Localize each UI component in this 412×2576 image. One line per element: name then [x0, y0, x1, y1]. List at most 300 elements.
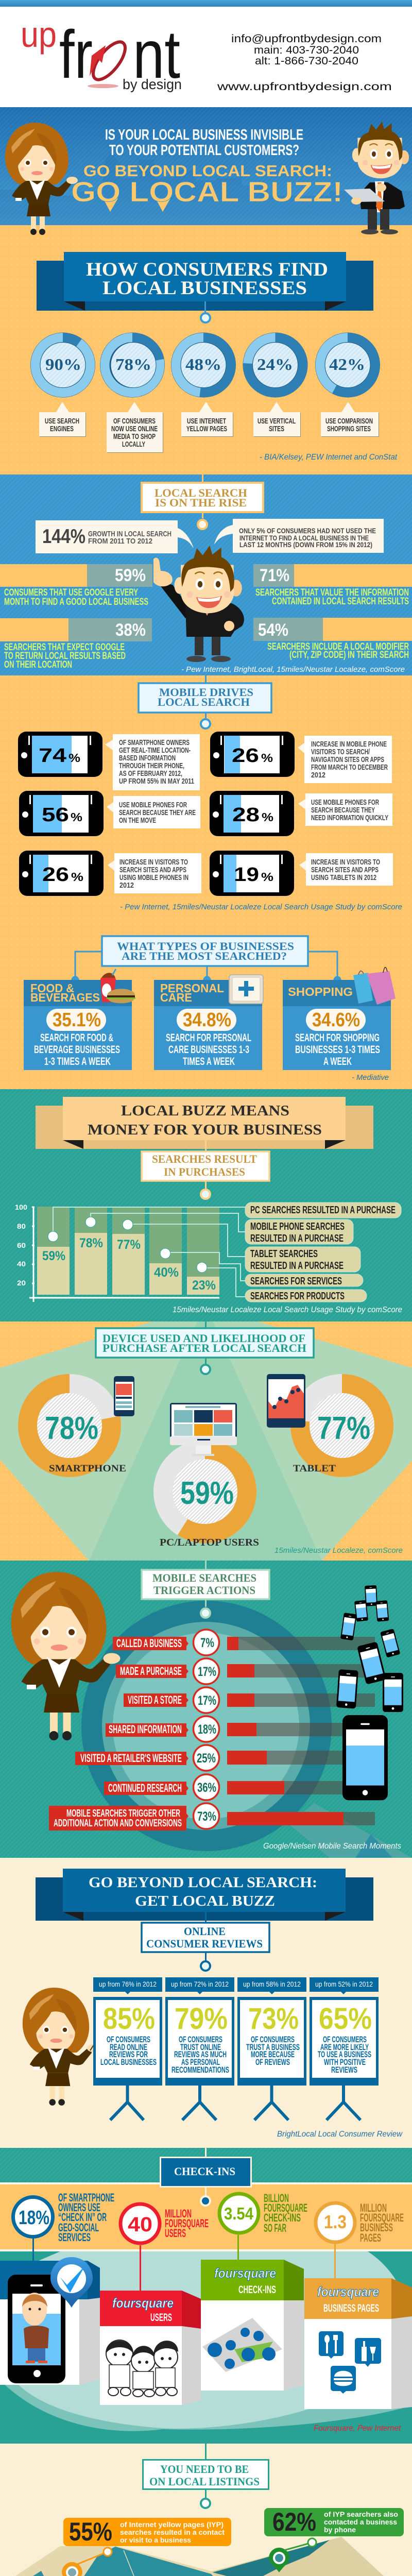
phone: 56%: 56 — [42, 804, 69, 826]
icon: desktop monitor — [170, 1403, 237, 1456]
heading box: searches result in purchases — [142, 1140, 269, 1199]
row: called a business: CALLED A BUSINESS — [116, 1637, 182, 1650]
review board: 65%: REVIEWS — [331, 2065, 357, 2075]
stat: 18%: OF SMARTPHONE — [58, 2191, 114, 2204]
heading box: DEVICE USED AND LIKELIHOOD OF — [102, 1332, 305, 1345]
icon: cluster of phones — [336, 1585, 403, 1800]
heading box: IS ON THE RISE — [155, 496, 247, 509]
review board: 85%: OF CONSUMERS — [107, 2035, 150, 2044]
stat: 1.3 million: 1.3 — [324, 2211, 347, 2232]
stat: 18%: SERVICES — [58, 2231, 91, 2244]
contact details: info@upfrontbydesign.com — [231, 33, 382, 45]
heading box: YOU NEED TO BE — [160, 2463, 249, 2476]
stat: 18%: 18% — [19, 2207, 49, 2229]
icon: map with crowns — [202, 2318, 282, 2372]
text: 74%: GET REAL-TIME LOCATION- — [119, 746, 191, 755]
bar chart: 80 — [17, 1222, 26, 1230]
hero title: GO BEYOND LOCAL SEARCH: — [83, 162, 332, 180]
card: food and beverages: SEARCH FOR FOOD & — [40, 1032, 113, 1044]
row: called a business: 7% — [200, 1636, 214, 1650]
heading box: MOBILE SEARCHES — [152, 1571, 256, 1584]
bar chart: 78% — [79, 1236, 103, 1250]
hero title: GO LOCAL BUZZ! — [71, 176, 343, 208]
text: 26%: 2012 — [311, 771, 325, 779]
row: visited a retailer's website: 25% — [197, 1751, 216, 1766]
phone: 26% visitors: 26 — [42, 864, 69, 886]
bar chart: 20 — [17, 1279, 26, 1287]
block: foursquare users: USERS — [150, 2312, 172, 2324]
source: BrightLocal Local Consumer Review — [277, 2130, 403, 2139]
donut: smartphone 78%: SMARTPHONE — [49, 1463, 126, 1474]
stat captions — [4, 587, 409, 670]
stat captions: TO RETURN LOCAL RESULTS BASED — [4, 651, 126, 662]
heading box: CHECK-INS — [174, 2165, 235, 2178]
bar chart: 40% — [154, 1265, 179, 1280]
row: shared information — [106, 1716, 375, 1742]
callout: 5%: LAST 12 MONTHS (DOWN FROM 15% IN 2012) — [239, 540, 372, 549]
row: made a purchase: 17% — [198, 1665, 216, 1679]
row: visited a store — [124, 1687, 375, 1713]
donut: 78% — [100, 333, 165, 398]
text: 28%: SEARCH BECAUSE THEY — [311, 806, 375, 815]
phone: 19%: % — [261, 870, 273, 884]
heading box: TRIGGER ACTIONS — [153, 1584, 255, 1597]
callout: 62%: 62% — [272, 2507, 316, 2536]
logo header — [0, 7, 412, 107]
text: 26% visitors — [108, 853, 201, 893]
icon: check pin — [50, 2257, 93, 2308]
background curves — [0, 2251, 412, 2431]
bar: 38% — [0, 618, 152, 641]
bar chart: RESULTED IN A PURCHASE — [250, 1233, 344, 1244]
icon: burger and drink — [100, 969, 135, 1003]
donut: pc 59%: 59% — [180, 1476, 234, 1511]
card: personal care: 34.8% — [183, 1009, 231, 1031]
row: additional action: 73% — [197, 1809, 216, 1824]
phone: 74%: % — [68, 751, 80, 765]
callout: 144%: 144% — [42, 526, 85, 548]
review board: 85%: LOCAL BUSINESSES — [100, 2057, 157, 2067]
stat: 3.54 billion: 3.54 — [224, 2204, 254, 2223]
review board: 79%: 79% — [175, 2002, 228, 2036]
contact details — [217, 33, 392, 93]
review board: 79%: AS PERSONAL — [181, 2057, 220, 2067]
donut: tablet 77%: 77% — [317, 1411, 370, 1446]
row: shared information: SHARED INFORMATION — [109, 1723, 182, 1736]
stat: 3.54 billion: FOURSQUARE — [264, 2201, 307, 2214]
heading box — [142, 474, 263, 529]
source: 15miles/Neustar Localeze, comScore — [274, 1546, 403, 1555]
callout: 144% — [36, 520, 194, 553]
leader lines — [53, 1207, 245, 1297]
stat: 1.3 million — [316, 2201, 404, 2278]
donut: 90% — [30, 333, 95, 398]
donut: 24% — [243, 333, 308, 398]
heading box: business types: WHAT TYPES OF BUSINESSES — [117, 940, 294, 953]
donut captions: USE INTERNET — [187, 417, 226, 426]
donut: 42%: 42% — [329, 355, 365, 374]
bar: 38%: 38% — [115, 620, 146, 640]
bar chart: 23% — [192, 1278, 216, 1293]
text: 26% — [298, 736, 392, 783]
character: pointing man — [153, 546, 244, 662]
review board: 85%: up from 76% in 2012 — [99, 1980, 157, 1988]
block: check-in phone — [0, 2257, 100, 2385]
text: 26% visitors: 2012 — [119, 881, 134, 890]
bar: 54% — [253, 618, 412, 641]
row: made a purchase — [116, 1658, 375, 1684]
donut captions: USE VERTICAL — [258, 417, 296, 426]
heading box: ON LOCAL LISTINGS — [149, 2475, 260, 2488]
logo: upfront by design: by design — [123, 76, 182, 92]
logo: upfront by design: nt — [133, 16, 180, 92]
card: shopping — [283, 967, 396, 1070]
block: foursquare check-ins: foursquare — [214, 2265, 276, 2281]
panel: go beyond local search — [0, 1858, 412, 2148]
review board: 73%: 73% — [248, 2002, 299, 2036]
panel: mobile and business types — [0, 675, 412, 1089]
card: food and beverages — [24, 969, 135, 1070]
bar chart: 60 — [17, 1241, 26, 1249]
donut: 42% — [315, 333, 380, 398]
text: 28%: USE MOBILE PHONES FOR — [311, 798, 379, 807]
bar chart: 77% — [117, 1238, 141, 1252]
pin: orange — [62, 2548, 112, 2576]
bar chart: 40 — [17, 1260, 26, 1268]
bar chart — [15, 1202, 401, 1302]
review board: 65%: ARE MORE LIKELY — [320, 2042, 369, 2052]
block: foursquare check-ins: CHECK-INS — [238, 2284, 276, 2296]
source: 15miles/Neustar Localeze Local Search Usage Study by comScore — [173, 1306, 402, 1314]
icon: plus key — [229, 975, 263, 1004]
heading box: business types: ARE THE MOST SEARCHED? — [122, 950, 287, 962]
callout: 55%: of Internet yellow pages (IYP) — [120, 2520, 224, 2529]
donut: smartphone 78% — [28, 1384, 126, 1474]
card: food and beverages: BEVERAGES — [30, 991, 100, 1004]
review board: 65% — [310, 1977, 379, 2120]
donut: 78%: 78% — [115, 355, 151, 374]
callout: 5%: INTERNET TO FIND A LOCAL BUSINESS IN THE — [239, 534, 369, 542]
callout: 62%: of IYP searchers also — [324, 2510, 398, 2518]
pin: green — [269, 2538, 316, 2572]
icon: three characters — [106, 2340, 178, 2397]
phone: 28%: 28 — [232, 804, 260, 826]
heading box: business types — [71, 936, 341, 984]
text: 56%: SEARCH BECAUSE THEY ARE — [119, 808, 196, 817]
review board: 79%: up from 72% in 2012 — [171, 1980, 229, 1988]
logo: upfront by design — [21, 14, 182, 92]
donut captions: USE SEARCH — [45, 417, 79, 426]
donut captions: SITES — [269, 425, 284, 433]
review board: 73%: TRUST A BUSINESS — [246, 2042, 300, 2052]
review board: 73% — [237, 1977, 306, 2120]
heading ribbon — [37, 252, 373, 311]
skyline — [0, 152, 412, 225]
callout: 62%: by phone — [324, 2526, 356, 2534]
review board: 65%: up from 52% in 2012 — [315, 1980, 373, 1988]
block: foursquare users: foursquare — [112, 2295, 174, 2311]
card: personal care: PERSONAL — [160, 981, 224, 995]
phone: 26%: 26 — [232, 745, 259, 767]
heading ribbon: LOCAL BUSINESSES — [102, 278, 307, 299]
block: foursquare business pages — [304, 2278, 412, 2409]
donut captions: MEDIA TO SHOP — [113, 432, 156, 441]
row: visited a retailer's website: VISITED A RETAILER'S WEBSITE — [80, 1752, 182, 1765]
stat: 3.54 billion — [219, 2192, 307, 2260]
callout: 144%: GROWTH IN LOCAL SEARCH — [88, 530, 171, 538]
text: 19%: USING TABLETS IN 2012 — [311, 873, 376, 882]
donut: 24%: 24% — [257, 355, 293, 374]
review board: 65%: TO USE A BUSINESS — [318, 2049, 371, 2059]
icon: phone with person — [8, 2275, 65, 2383]
hero question — [105, 127, 303, 159]
stat: 40 million: USERS — [165, 2227, 186, 2240]
heading ribbon: GET LOCAL BUZZ — [135, 1893, 275, 1909]
stat: 18%: “CHECK IN” OR — [58, 2211, 107, 2224]
icon: shopping bags — [353, 967, 396, 1005]
stat: 18%: GEO-SOCIAL — [58, 2221, 99, 2234]
heading box: mobile drives local search — [139, 675, 271, 728]
heading box — [143, 2444, 269, 2508]
text: 28% — [298, 793, 392, 826]
bar chart: SEARCHES FOR SERVICES — [250, 1276, 342, 1287]
character: woman with pointer — [23, 1988, 106, 2106]
stat captions: MONTH TO FIND A GOOD LOCAL BUSINESS — [4, 597, 148, 607]
contact details: www.upfrontbydesign.com — [217, 81, 392, 93]
callout: 62%: contacted a business — [324, 2518, 397, 2526]
panel: hero — [0, 107, 412, 225]
connector — [201, 301, 210, 323]
review board: 79%: REVIEWS AS MUCH — [174, 2049, 227, 2059]
row: continued research: 36% — [197, 1781, 216, 1795]
stat: 40 million: FOURSQUARE — [165, 2217, 209, 2230]
donut captions — [39, 402, 379, 453]
phone: 26% — [210, 732, 295, 777]
icon: bottle and glass — [355, 2338, 381, 2367]
stat: 18%: OWNERS USE — [58, 2201, 100, 2214]
heading ribbon — [36, 1097, 373, 1149]
bar chart: TABLET SEARCHES — [250, 1248, 318, 1260]
heading ribbon: LOCAL BUZZ MEANS — [121, 1103, 289, 1119]
text: 56%: USE MOBILE PHONES FOR — [119, 801, 187, 809]
card: shopping: 34.6% — [312, 1009, 360, 1031]
callout: 55% — [63, 2517, 231, 2546]
callout: 5% — [214, 519, 384, 553]
heading box — [161, 2148, 251, 2206]
phone: 26% visitors: % — [71, 870, 83, 884]
stat: 18% — [13, 2191, 114, 2261]
source: Foursquare, Pew Internet — [314, 2424, 401, 2433]
callout: 55%: 55% — [69, 2517, 112, 2546]
row: additional action: MOBILE SEARCHES TRIGGER OTHER — [66, 1808, 180, 1819]
card: personal care: SEARCH FOR PERSONAL — [166, 1032, 251, 1044]
text: 74%: THROUGH THEIR PHONE, — [119, 761, 184, 770]
stat: 40 million: 40 — [128, 2213, 152, 2236]
text: 74%: UP FROM 55% IN MAY 2011 — [119, 777, 194, 786]
character: woman — [11, 1572, 121, 1740]
card: shopping: SHOPPING — [288, 985, 353, 998]
callout: 62% — [264, 2507, 404, 2536]
review board: 79% — [165, 1977, 234, 2120]
heading box: mobile drives local search: MOBILE DRIVES — [159, 686, 253, 699]
phone: 74%: 74 — [39, 745, 66, 767]
donut: smartphone 78%: 78% — [45, 1411, 98, 1446]
donut captions: OF CONSUMERS — [113, 417, 156, 426]
heading ribbon — [36, 1869, 373, 1921]
donut captions: LOCALLY — [122, 440, 145, 449]
phone: 28% — [210, 791, 294, 836]
row: shared information: 18% — [198, 1722, 216, 1737]
stat captions: SEARCHERS THAT EXPECT GOOGLE — [4, 642, 125, 653]
text: 56%: ON THE MOVE — [119, 816, 156, 825]
donut: 48% — [171, 333, 236, 398]
panel: device used — [0, 1321, 412, 1561]
bar: 59%: 59% — [115, 566, 146, 585]
card: food and beverages: 35.1% — [53, 1009, 101, 1031]
text: 74%: BASED INFORMATION — [119, 754, 176, 762]
panel: local buzz means money — [0, 1089, 412, 1321]
heading box: searches result in purchases: SEARCHES RESULT — [152, 1153, 257, 1165]
icon: magnifying glass — [81, 1601, 412, 1858]
source: - Pew Internet, 15miles/Neustar Localeze Local Search Usage Study by comScore — [120, 903, 402, 911]
block: foursquare check-ins — [201, 2260, 304, 2391]
row: visited a store: 17% — [198, 1693, 216, 1708]
donut captions: USE COMPARISON — [325, 417, 373, 426]
stat: 3.54 billion: BILLION — [264, 2192, 289, 2205]
bar chart: SEARCHES FOR PRODUCTS — [250, 1291, 345, 1302]
donut: 90%: 90% — [45, 355, 81, 374]
donut: 48%: 48% — [185, 355, 221, 374]
review board: 79%: TRUST ONLINE — [180, 2042, 221, 2052]
donut: tablet 77% — [293, 1384, 384, 1474]
review board: 65%: 65% — [319, 2002, 372, 2036]
bar: 71%: 71% — [260, 566, 289, 585]
panel: check-ins — [0, 2148, 412, 2444]
heading box: online consumer reviews — [142, 1912, 269, 1971]
row: additional action: ADDITIONAL ACTION AND CONVERSIONS — [54, 1818, 182, 1829]
text: 74% — [105, 734, 200, 790]
phone: 74% — [18, 732, 102, 777]
block: foursquare users — [100, 2291, 201, 2405]
stat: 40 million — [121, 2204, 209, 2291]
text: 26% visitors: SEARCH SITES AND APPS — [119, 866, 186, 874]
character: hero man with tablet — [344, 122, 409, 234]
text: 19%: INCREASE IN VISITORS TO — [311, 858, 380, 867]
text: 56% — [107, 796, 200, 828]
review board: 85% — [93, 1977, 162, 2120]
review board: 85%: 85% — [103, 2002, 155, 2036]
icon: tablet — [267, 1374, 305, 1428]
phone: 19% — [210, 851, 294, 896]
stat: 40 million: MILLION — [165, 2207, 192, 2220]
bar chart: 59% — [42, 1249, 65, 1263]
bar chart: RESULTED IN A PURCHASE — [250, 1260, 344, 1272]
stat: 1.3 million: MILLION — [360, 2201, 387, 2214]
callout: 144%: FROM 2011 TO 2012 — [88, 537, 152, 546]
heading box: searches result in purchases: IN PURCHASES — [164, 1165, 245, 1178]
donut captions: ENGINES — [50, 425, 74, 433]
hero question: TO YOUR POTENTIAL CUSTOMERS? — [109, 142, 299, 159]
review board: 85%: READ ONLINE — [110, 2042, 147, 2052]
heading ribbon: HOW CONSUMERS FIND — [86, 259, 328, 280]
review board: 79%: OF CONSUMERS — [179, 2035, 222, 2044]
row: called a business — [113, 1630, 375, 1655]
card: personal care: CARE BUSINESSES 1-3 — [168, 1044, 249, 1056]
logo: upfront by design: fr — [59, 16, 93, 92]
review board: 73%: MORE BECAUSE — [251, 2049, 295, 2059]
bar: 59% — [0, 564, 152, 587]
card: shopping: A WEEK — [323, 1056, 352, 1067]
text: 26%: VISITORS TO SEARCH/ — [311, 748, 370, 756]
phone: 28%: % — [262, 810, 273, 824]
contact details: main: 403-730-2040 — [254, 44, 359, 56]
heading box — [96, 1321, 314, 1374]
legend pills — [245, 1202, 401, 1302]
donut captions: SHOPPING SITES — [327, 425, 371, 433]
bar chart: MOBILE PHONE SEARCHES — [250, 1221, 345, 1232]
row: made a purchase: MADE A PURCHASE — [120, 1665, 182, 1677]
text: 74%: OF SMARTPHONE OWNERS — [119, 738, 190, 747]
source: Google/Nielsen Mobile Search Moments — [263, 1842, 401, 1851]
logo: upfront by design: up — [21, 14, 57, 55]
phone: 26%: % — [261, 751, 273, 765]
text: 19% — [299, 853, 393, 886]
card: personal care: CARE — [160, 991, 192, 1004]
icon: burger — [331, 2366, 356, 2394]
review board: 79%: RECOMMENDATIONS — [171, 2065, 229, 2075]
icon: smartphone — [114, 1376, 134, 1416]
phone: 26% visitors — [19, 851, 104, 896]
text: 26% visitors: USING MOBILE PHONES IN — [119, 873, 188, 882]
callout: 55%: searches resulted in a contact — [120, 2528, 225, 2536]
top bar — [0, 0, 412, 7]
phone: 56% — [19, 791, 104, 836]
review board: 73%: OF CONSUMERS — [251, 2035, 295, 2044]
bar chart: 100 — [15, 1203, 27, 1211]
panel: how consumers find — [0, 225, 412, 474]
donut: pc 59%: PC/LAPTOP USERS — [160, 1537, 259, 1548]
heading ribbon: GO BEYOND LOCAL SEARCH: — [89, 1875, 317, 1891]
phone: 56%: % — [71, 810, 82, 824]
heading box: online consumer reviews: ONLINE — [184, 1925, 226, 1938]
callout: 5%: ONLY 5% OF CONSUMERS HAD NOT USED THE — [239, 527, 376, 535]
hero question: IS YOUR LOCAL BUSINESS INVISIBLE — [105, 127, 303, 143]
heading ribbon: MONEY FOR YOUR BUSINESS — [88, 1122, 322, 1138]
row: additional action — [49, 1803, 375, 1831]
stat: 3.54 billion: SO FAR — [264, 2222, 286, 2234]
row: visited a retailer's website — [75, 1745, 375, 1771]
review board: 85%: REVIEWS FOR — [109, 2049, 148, 2059]
hero title — [71, 162, 343, 212]
donut captions: YELLOW PAGES — [186, 425, 227, 433]
heading box: LOCAL SEARCH — [154, 486, 247, 499]
contact details: alt: 1-866-730-2040 — [255, 55, 358, 67]
callout: 55%: or visit to a business — [120, 2536, 191, 2544]
stat captions: CONSUMERS THAT USE GOOGLE EVERY — [4, 587, 138, 598]
review board: 65%: WITH POSITIVE — [324, 2057, 366, 2067]
source: - Pew Internet, BrightLocal, 15miles/Neustar Localeze, comScore — [181, 665, 405, 674]
panel: mobile searches trigger actions — [0, 1561, 412, 1858]
text: 74%: AS OF FEBRUARY 2012, — [119, 769, 182, 778]
card: personal care — [154, 975, 263, 1070]
card: food and beverages: 1-3 TIMES A WEEK — [44, 1056, 111, 1067]
text: 19%: SEARCH SITES AND APPS — [311, 866, 379, 874]
stat: 1.3 million: PAGES — [360, 2231, 381, 2244]
donut: pc 59% — [160, 1450, 259, 1548]
bar: 54%: 54% — [258, 620, 288, 640]
donut: tablet 77%: TABLET — [293, 1463, 336, 1474]
heading box — [142, 1561, 269, 1618]
